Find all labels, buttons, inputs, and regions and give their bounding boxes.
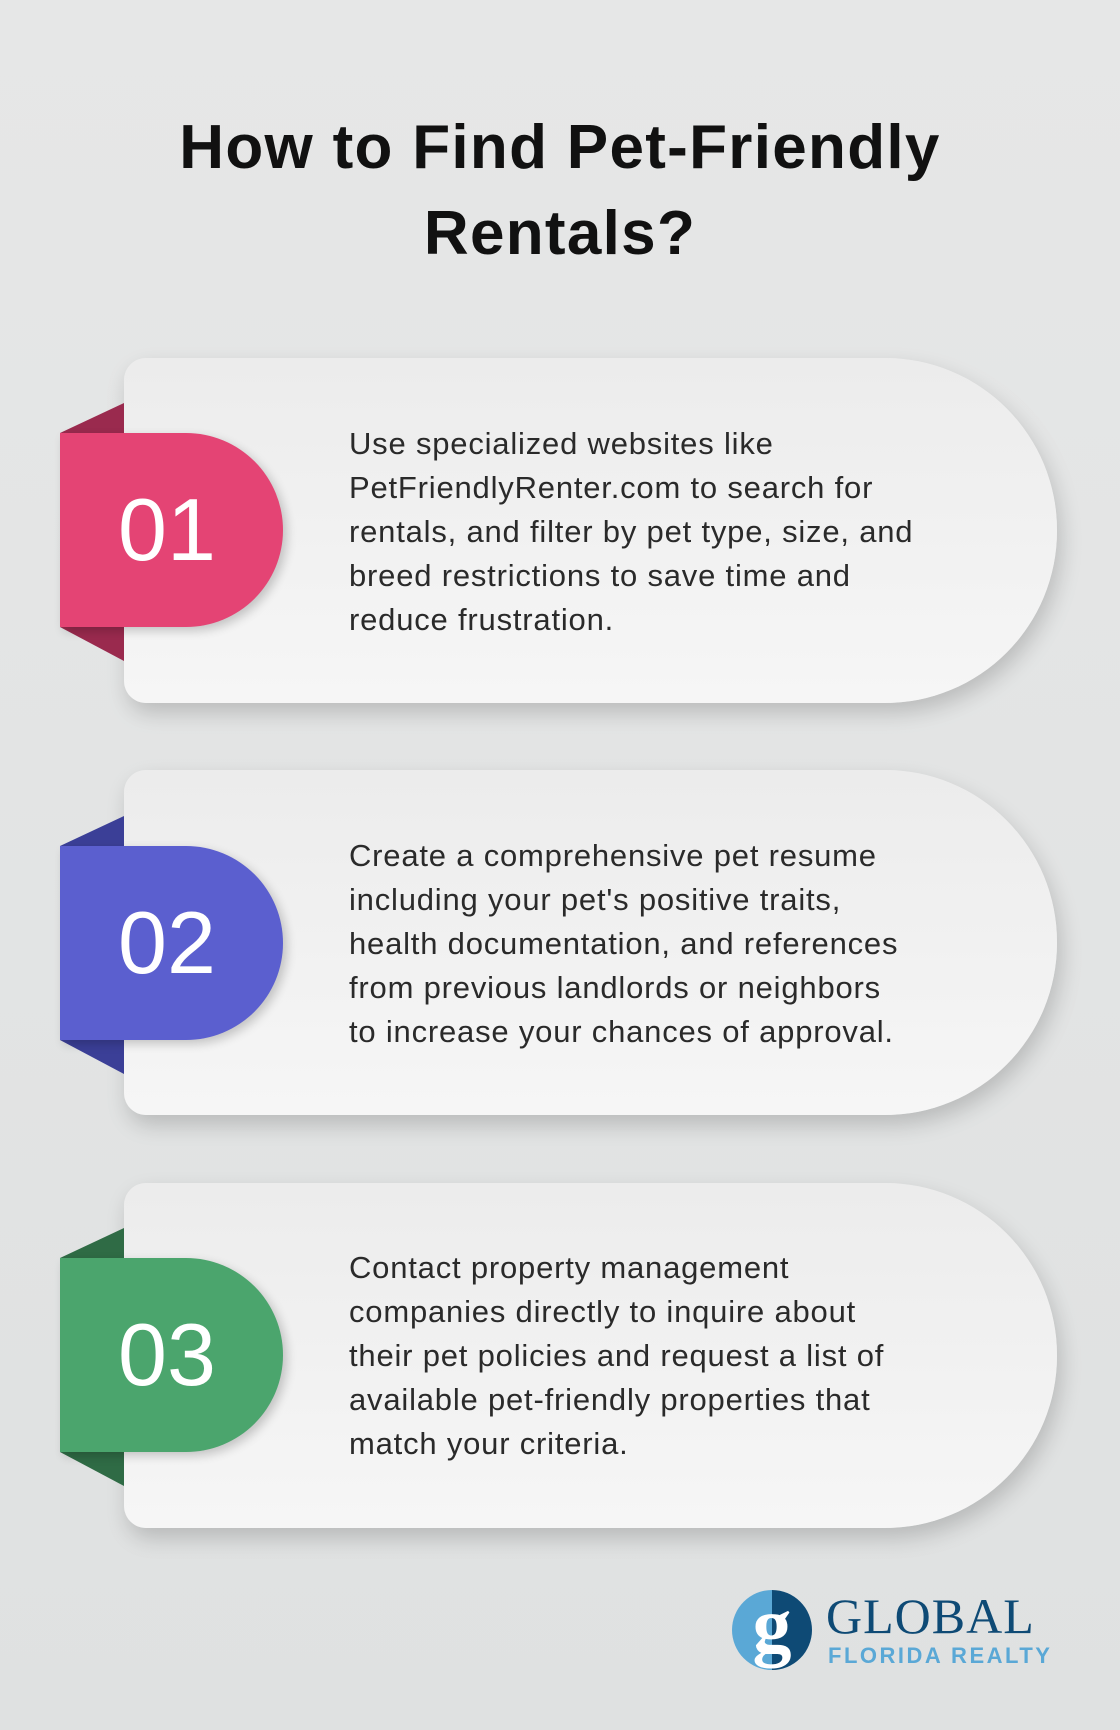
text: step 2: including your pet's positive traits, (349, 882, 841, 917)
badge: 03: 03 (118, 1305, 216, 1404)
fold: step 1 (60, 403, 124, 661)
fold: step 3 (60, 1228, 124, 1486)
title (179, 113, 941, 268)
text: step 3 (349, 1250, 884, 1461)
text: step 2 (349, 838, 898, 1049)
logo: FLORIDA REALTY (828, 1643, 1052, 1668)
text: step 2: to increase your chances of approval. (349, 1014, 894, 1049)
text: step 2: Create a comprehensive pet resume (349, 838, 877, 873)
text: step 1: reduce frustration. (349, 602, 614, 637)
title: How to Find Pet-Friendly (179, 113, 941, 182)
badge: 03 (60, 1258, 283, 1452)
fold: step 2 (60, 816, 124, 1074)
text: step 1: rentals, and filter by pet type, size, and (349, 514, 913, 549)
text: step 3: Contact property management (349, 1250, 789, 1285)
text: step 3: match your criteria. (349, 1426, 629, 1461)
panel: step 1 card (124, 358, 1057, 703)
logo (732, 1581, 1052, 1670)
panel: step 3 card (124, 1183, 1057, 1528)
badge: 01 (60, 433, 283, 627)
text: step 3: their pet policies and request a list of (349, 1338, 884, 1373)
badge: 01: 01 (118, 480, 216, 579)
icon: g circle (732, 1590, 812, 1670)
text: step 3: companies directly to inquire about (349, 1294, 856, 1329)
text: step 3: available pet-friendly properties that (349, 1382, 871, 1417)
badge: 02 (60, 846, 283, 1040)
text: step 1: Use specialized websites like (349, 426, 774, 461)
text: step 2: from previous landlords or neighbors (349, 970, 881, 1005)
logo text: GLOBAL (826, 1588, 1035, 1644)
title: Rentals? (424, 199, 696, 268)
badge: 02: 02 (118, 893, 216, 992)
panel: step 2 card (124, 770, 1057, 1115)
text: step 1 (349, 426, 913, 637)
text: step 1: breed restrictions to save time and (349, 558, 851, 593)
icon: g circle: g (752, 1581, 792, 1668)
text: step 2: health documentation, and references (349, 926, 898, 961)
text: step 1: PetFriendlyRenter.com to search for (349, 470, 873, 505)
